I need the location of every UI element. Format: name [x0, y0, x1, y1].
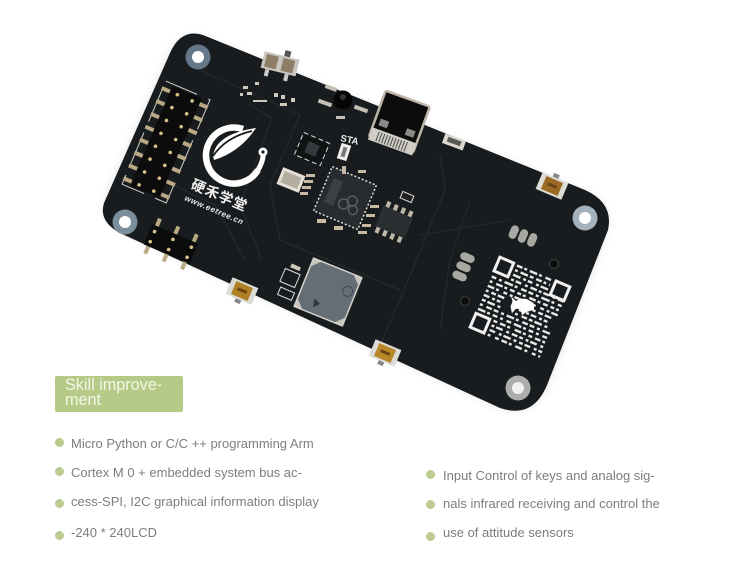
bullet 4 — [55, 531, 64, 540]
passive components left of mcu — [300, 174, 315, 195]
passive components around mcu — [317, 166, 379, 234]
board traces — [130, 70, 510, 345]
solder pads left — [451, 251, 476, 283]
sensor chip — [294, 132, 330, 166]
white indicator component — [442, 134, 466, 150]
pin header small — [141, 217, 201, 271]
pin header large — [121, 81, 211, 203]
push button bottom left — [224, 277, 258, 308]
push button right — [536, 169, 570, 200]
text line 2: nals infrared receiving and control the — [443, 496, 660, 511]
sta label: STA — [339, 133, 360, 148]
bullet 2 — [426, 500, 435, 509]
heading: skill improvement — [55, 376, 183, 412]
heading: skill improvement: ment — [65, 391, 101, 409]
bullet 1 — [426, 470, 435, 479]
bullet 2 — [55, 467, 64, 476]
rp2040 microcontroller — [314, 167, 376, 229]
text line 1: Input Control of keys and analog sig- — [443, 468, 655, 483]
text line 2: Cortex M 0 + embedded system bus ac- — [71, 465, 302, 480]
heading: skill improvement: Skill improve- — [65, 376, 162, 394]
crystal — [277, 167, 305, 193]
bullet 3 — [426, 532, 435, 541]
usb-c connector — [368, 91, 430, 156]
buzzer — [294, 258, 362, 326]
text line 3: use of attitude sensors — [443, 525, 574, 540]
board body — [103, 33, 609, 411]
mounting holes — [112, 44, 598, 400]
board shadow — [105, 37, 607, 408]
logo chinese text: 硬禾学堂 — [189, 176, 250, 214]
logo url text: www.eetree.cn — [183, 194, 245, 227]
text line 4: -240 * 240LCD — [71, 525, 157, 540]
via holes — [460, 260, 558, 306]
qr code — [470, 257, 570, 357]
text line 3: cess-SPI, I2C graphical information display — [71, 494, 319, 509]
bullet 3 — [55, 499, 64, 508]
slide switch — [259, 45, 301, 83]
transistor group near buzzer — [275, 262, 305, 300]
small components near switch — [240, 82, 295, 106]
logo — [206, 128, 268, 184]
bullet 1 — [55, 438, 64, 447]
solder pads top — [507, 224, 539, 248]
bullet list right — [426, 468, 660, 541]
bullet list left — [55, 436, 319, 540]
push button bottom — [367, 339, 401, 370]
text line 1: Micro Python or C/C ++ programming Arm — [71, 436, 314, 451]
infrared receiver — [318, 84, 368, 119]
small part above flash chip — [400, 191, 414, 203]
sta led — [337, 143, 351, 161]
flash chip — [373, 200, 415, 244]
